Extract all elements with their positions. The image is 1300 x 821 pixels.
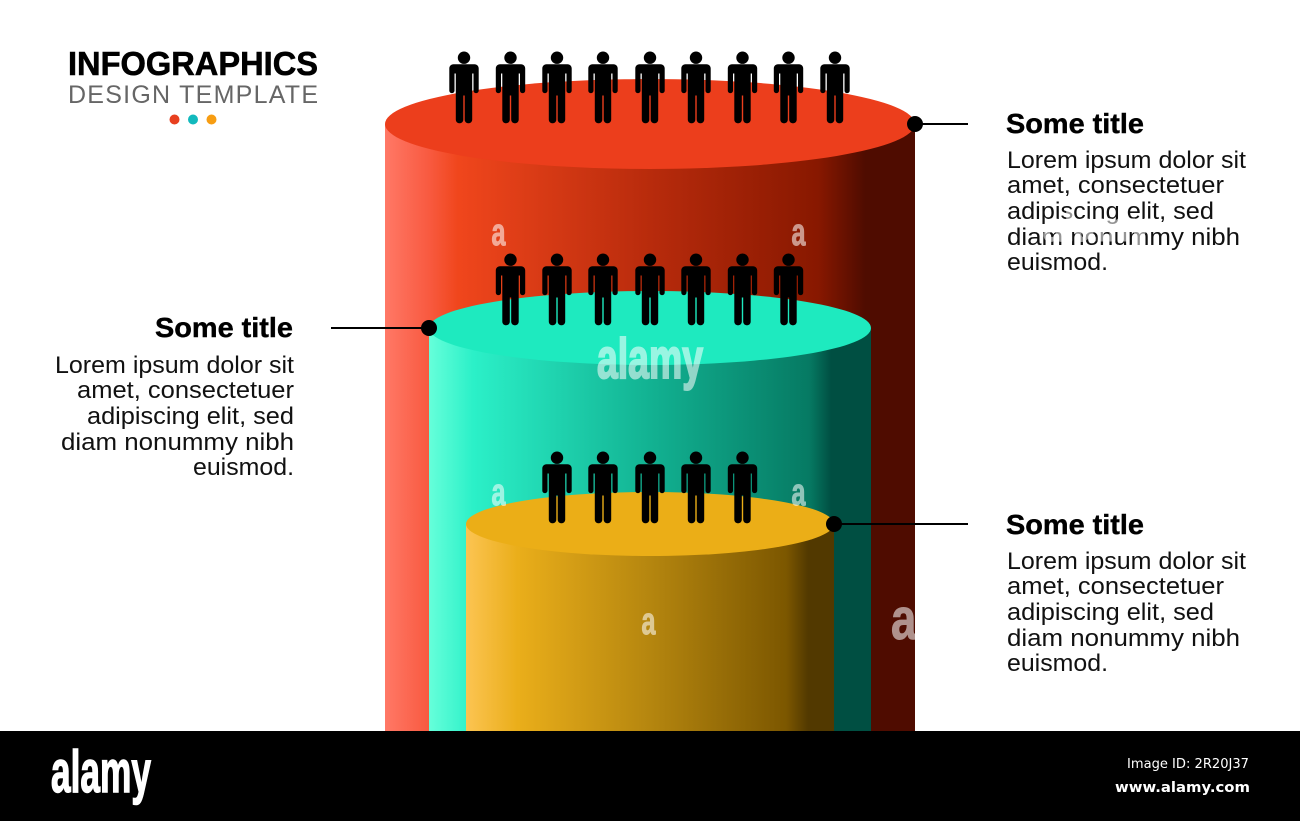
callout connector: teal cylinder bbox=[331, 320, 437, 336]
people row: seven figures on teal cylinder bbox=[496, 254, 803, 325]
text block: middle left: amet, consectetuer bbox=[77, 377, 294, 404]
text block: bottom right: Lorem ipsum dolor sit bbox=[1007, 548, 1246, 575]
website: www.alamy.com bbox=[1115, 780, 1250, 796]
text block: middle left bbox=[55, 312, 294, 481]
text block: top right: amet, consectetuer bbox=[1007, 172, 1224, 199]
footer logo: alamy bbox=[51, 739, 151, 805]
text block: bottom right: adipiscing elit, sed bbox=[1007, 599, 1214, 626]
text block: middle left: euismod. bbox=[193, 454, 294, 481]
watermark letters on lower cylinders: a bbox=[492, 472, 506, 514]
text block: bottom right: diam nonummy nibh bbox=[1007, 625, 1240, 652]
text block: bottom right: amet, consectetuer bbox=[1007, 573, 1224, 600]
header: infographics design template bbox=[68, 45, 318, 124]
cylinder: red, largest bbox=[385, 79, 915, 731]
footer bar bbox=[0, 731, 1300, 821]
watermark letters on lower cylinders bbox=[492, 472, 929, 652]
text block: top right: Some title bbox=[1006, 108, 1144, 139]
watermark letters on red cylinder bbox=[492, 212, 806, 254]
people row: five figures on yellow cylinder bbox=[542, 452, 757, 523]
watermark letters on red cylinder: a bbox=[792, 212, 806, 254]
watermark over top right text: alamy bbox=[1043, 203, 1151, 250]
text block: bottom right: Some title bbox=[1006, 509, 1144, 540]
text block: bottom right: euismod. bbox=[1007, 650, 1108, 677]
text block: middle left: adipiscing elit, sed bbox=[87, 403, 294, 430]
callout connector: yellow cylinder bbox=[826, 516, 968, 532]
text block: top right: adipiscing elit, sed bbox=[1007, 198, 1214, 225]
watermark: alamy centre: alamy bbox=[597, 327, 703, 391]
text block: top right: diam nonummy nibh bbox=[1007, 224, 1240, 251]
watermark letters on red cylinder: a bbox=[492, 212, 506, 254]
decorative colour dots bbox=[170, 114, 216, 124]
text block: top right bbox=[1006, 108, 1246, 276]
text block: top right: Lorem ipsum dolor sit bbox=[1007, 147, 1246, 174]
watermark letters on lower cylinders: a bbox=[792, 472, 806, 514]
text block: bottom right bbox=[1006, 509, 1246, 677]
cylinder: teal, middle bbox=[429, 291, 871, 731]
text block: middle left: Some title bbox=[155, 312, 293, 343]
subtitle: DESIGN TEMPLATE bbox=[68, 81, 318, 109]
text block: middle left: Lorem ipsum dolor sit bbox=[55, 352, 294, 379]
text block: middle left: diam nonummy nibh bbox=[61, 429, 294, 456]
people row: nine figures on red cylinder bbox=[449, 52, 850, 123]
text block: top right: euismod. bbox=[1007, 249, 1108, 276]
image id: Image ID: 2R20J37 bbox=[1127, 756, 1249, 772]
watermark letters on lower cylinders: al bbox=[891, 587, 929, 652]
callout connector: red cylinder bbox=[907, 116, 968, 132]
watermark letters on lower cylinders: a bbox=[642, 601, 656, 643]
cylinder: yellow, smallest bbox=[466, 492, 834, 731]
title: INFOGRAPHICS bbox=[68, 45, 318, 82]
